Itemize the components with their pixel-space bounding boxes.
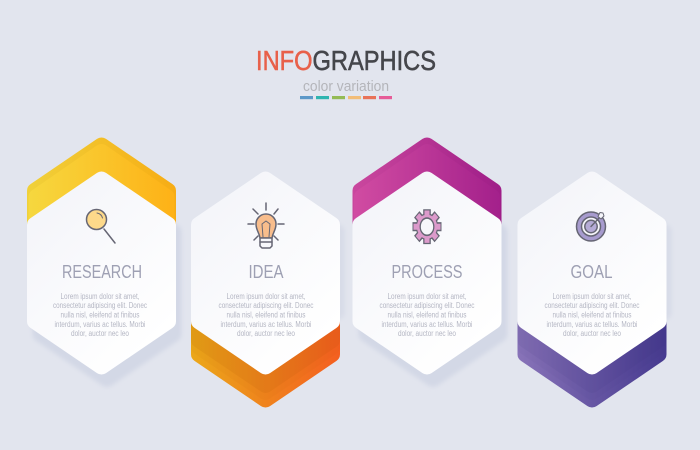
text: process: consectetur adipiscing elit. Donec [380,301,474,310]
text: idea [218,292,314,338]
icon: target [576,212,606,241]
icon: magnifier [86,210,115,243]
text: goal: Lorem ipsum dolor sit amet, [552,292,632,301]
white hexagon card [199,180,332,366]
text: goal: nulla nisl, eleifend at finibus [552,310,632,320]
white hexagon card [360,180,494,366]
subtitle: color variation [303,79,389,95]
text: goal: interdum, varius ac tellus. Morbi [546,320,638,329]
text: goal [544,292,640,338]
text: process: nulla nisl, eleifend at finibus [388,310,466,320]
panel: goal [526,180,664,400]
text: goal: consectetur adipiscing elit. Donec [544,301,640,310]
heading: goal: GOAL [570,262,612,282]
icon: light bulb [248,203,284,248]
text: idea: interdum, varius ac tellus. Morbi [220,320,312,329]
text: idea: dolor, auctor nec leo [237,329,295,338]
text: idea: consectetur adipiscing elit. Donec [218,301,314,310]
text: research: dolor, auctor nec leo [71,329,129,338]
text: research: Lorem ipsum dolor sit amet, [60,292,140,301]
panel: process [360,146,500,379]
text: process: dolor, auctor nec leo [398,329,456,338]
text: research: consectetur adipiscing elit. Donec [53,301,147,310]
orange bottom band [199,280,332,400]
color swatches [300,96,392,99]
text: process: Lorem ipsum dolor sit amet, [388,292,466,301]
purple bottom band [526,280,658,400]
icon: gear [412,209,442,244]
text: process [380,292,474,338]
text: goal: dolor, auctor nec leo [563,329,621,338]
heading: research: RESEARCH [62,262,142,282]
text: process: interdum, varius ac tellus. Morbi [382,320,473,329]
heading: idea: IDEA [248,262,284,282]
white hexagon card [526,180,658,366]
panel: idea [199,180,337,400]
panel: research [35,146,174,379]
text: idea: nulla nisl, eleifend at finibus [226,310,306,320]
title: INFOGRAPHICS [256,45,436,76]
text: research: interdum, varius ac tellus. Morbi [54,320,146,329]
text: research [53,292,147,338]
heading: process: PROCESS [392,262,462,282]
yellow top band [35,146,168,260]
magenta top band [360,146,494,260]
text: research: nulla nisl, eleifend at finibus [60,310,140,320]
white hexagon card [35,180,168,366]
text: idea: Lorem ipsum dolor sit amet, [226,292,306,301]
